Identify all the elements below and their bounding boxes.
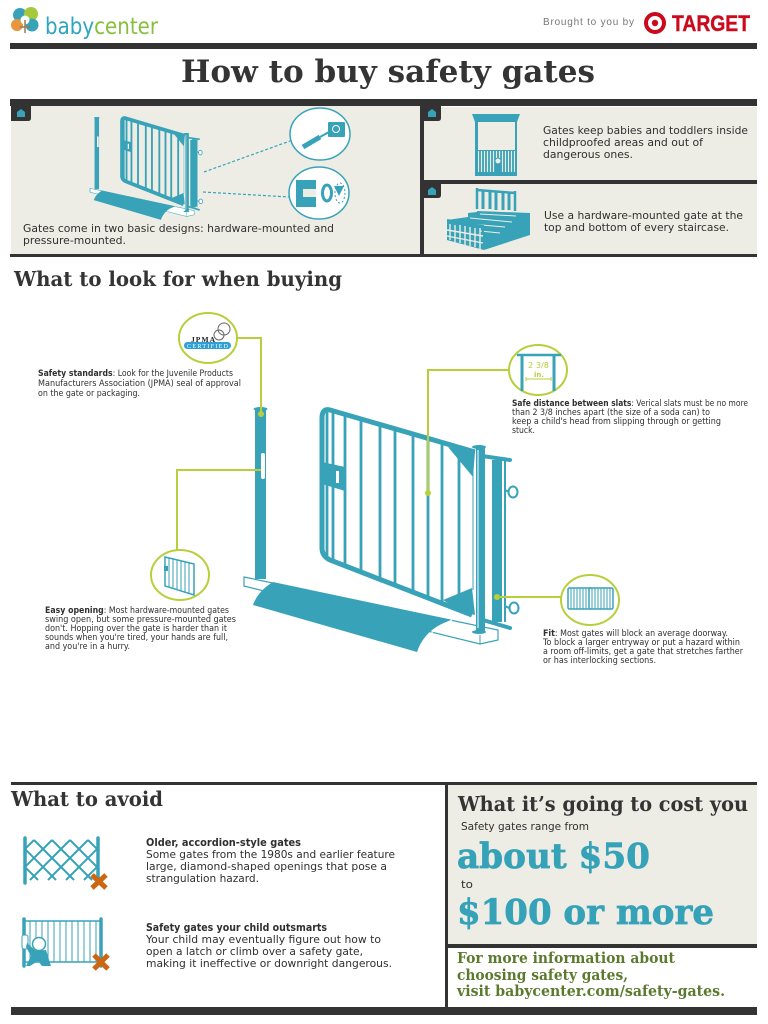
icon: slat spacing: in. — [534, 371, 544, 379]
icon: accordion gate with X — [23, 836, 108, 890]
text: keep babies inside: dangerous ones. — [543, 149, 633, 161]
text: fit: To block a larger entryway or put a hazard within — [542, 638, 740, 648]
item: accordion gates — [0, 837, 395, 888]
text: keep babies inside: Gates keep babies and toddlers inside — [543, 125, 748, 137]
text: easy opening: sounds when you're tired, your hands are full, — [45, 633, 228, 643]
callout: safety standards — [38, 313, 264, 417]
text: to: to — [461, 879, 473, 891]
text: easy opening: swing open, but some pressure-mounted gates — [45, 615, 237, 625]
panel: two gate designs — [11, 104, 420, 254]
icon: home tab — [11, 104, 31, 121]
icon: slat spacing — [509, 345, 567, 395]
dashed connectors — [203, 141, 290, 197]
heading: what to avoid: What to avoid — [10, 787, 163, 811]
text: staircase: top and bottom of every staircase. — [544, 222, 729, 234]
text: child outsmarts — [145, 922, 392, 970]
more information link: For more information about — [457, 950, 675, 967]
icon: doorway with gate and child — [472, 114, 520, 176]
text: accordion gates: large, diamond-shaped openings that pose a — [146, 861, 387, 873]
text: child outsmarts: open a latch or climb over a safety gate, — [146, 946, 363, 958]
icon: staircase with gates — [447, 188, 530, 250]
babycenter logo: babycenter — [45, 14, 158, 40]
text: safe distance: stuck. — [512, 426, 535, 436]
text: keep babies inside — [543, 125, 748, 161]
text: child outsmarts: making it ineffective or downright dangerous. — [146, 958, 392, 970]
text: easy opening: and you're in a hurry. — [45, 642, 130, 652]
text: easy opening: Easy opening: Most hardware-mounted gates — [45, 606, 230, 616]
heading: cost: What it’s going to cost you — [457, 792, 748, 816]
text: child outsmarts: Your child may eventually figure out how to — [145, 934, 381, 946]
text: accordion gates — [146, 837, 395, 885]
callout: fit — [494, 575, 743, 666]
more information link: visit babycenter.com/safety-gates. — [456, 983, 725, 1000]
callout: easy opening — [45, 470, 261, 652]
icon: pressure mount detail — [289, 167, 349, 219]
icon: hardware mount detail — [290, 108, 350, 160]
icon: child at gate with X — [22, 919, 108, 969]
text: accordion gates: Older, accordion-style gates — [146, 837, 301, 849]
price: about $50: about $50 — [457, 836, 650, 877]
text: fit: Fit: Most gates will block an average doorway. — [543, 629, 728, 639]
text: safety standards — [38, 369, 241, 399]
text: range intro: Safety gates range from — [461, 821, 589, 833]
text: safe distance — [512, 399, 748, 436]
text: safe distance: keep a child's head from slipping through or getting — [512, 417, 721, 427]
icon: interlocking sections — [561, 575, 619, 625]
caption: two designs: Gates come in two basic designs: hardware-mounted and — [23, 223, 334, 235]
text: safety standards: on the gate or packaging. — [38, 389, 140, 399]
icon: slat spacing: 2 3/8 — [528, 361, 549, 370]
main gate diagram — [244, 407, 518, 652]
illustration: hardware-mounted gate — [90, 117, 203, 220]
text: safety standards: Safety standards: Look for the Juvenile Products — [38, 369, 234, 379]
caption: two designs: pressure-mounted. — [23, 235, 126, 247]
icon: swinging gate — [151, 550, 209, 600]
text: accordion gates: Some gates from the 1980s and earlier feature — [146, 849, 395, 861]
title: How to buy safety gates — [181, 54, 595, 90]
more information link — [456, 950, 725, 1000]
caption: two designs — [23, 223, 334, 247]
more information link: choosing safety gates, — [457, 967, 628, 984]
text: accordion gates: strangulation hazard. — [146, 873, 259, 885]
text: staircase: Use a hardware-mounted gate at the — [544, 210, 743, 222]
sponsor credit: Target — [543, 11, 750, 36]
text: keep babies inside: childproofed areas and out of — [543, 137, 703, 149]
panel: keep babies inside — [424, 105, 757, 180]
icon: home tab — [424, 105, 441, 121]
text: safe distance: Safe distance between slats: Verical slats must be no more — [512, 399, 748, 409]
panel: what it costs background — [448, 785, 757, 944]
text: child outsmarts: Safety gates your child outsmarts — [146, 922, 327, 934]
text: easy opening: don't. Hopping over the gate is harder than it — [45, 624, 228, 634]
text: fit — [542, 629, 743, 666]
babycenter logo — [11, 7, 158, 40]
text: safe distance: than 2 3/8 inches apart (the size of a soda can) to — [512, 408, 710, 418]
item: gates child outsmarts — [22, 919, 392, 970]
text: staircase — [544, 210, 743, 234]
sponsor credit: Target: Brought to you by — [543, 17, 634, 28]
text: fit: or has interlocking sections. — [543, 656, 656, 666]
icon: JPMA seal: JPMA — [191, 335, 216, 344]
heading: what to look for: What to look for when buying — [13, 267, 342, 291]
text: fit: a room off-limits, get a gate that stretches farther — [543, 647, 743, 657]
icon: home tab — [424, 182, 441, 198]
text: easy opening — [45, 606, 237, 652]
panel: staircase — [424, 182, 757, 254]
price: $100 or more: $100 or more — [457, 892, 714, 933]
sponsor credit: Target: TARGET — [672, 11, 750, 36]
icon: JPMA seal — [179, 313, 237, 363]
callout: safe distance between slats — [425, 345, 748, 496]
text: safety standards: Manufacturers Association (JPMA) seal of approval — [38, 379, 241, 389]
icon: JPMA seal: CERTIFIED — [187, 344, 229, 350]
